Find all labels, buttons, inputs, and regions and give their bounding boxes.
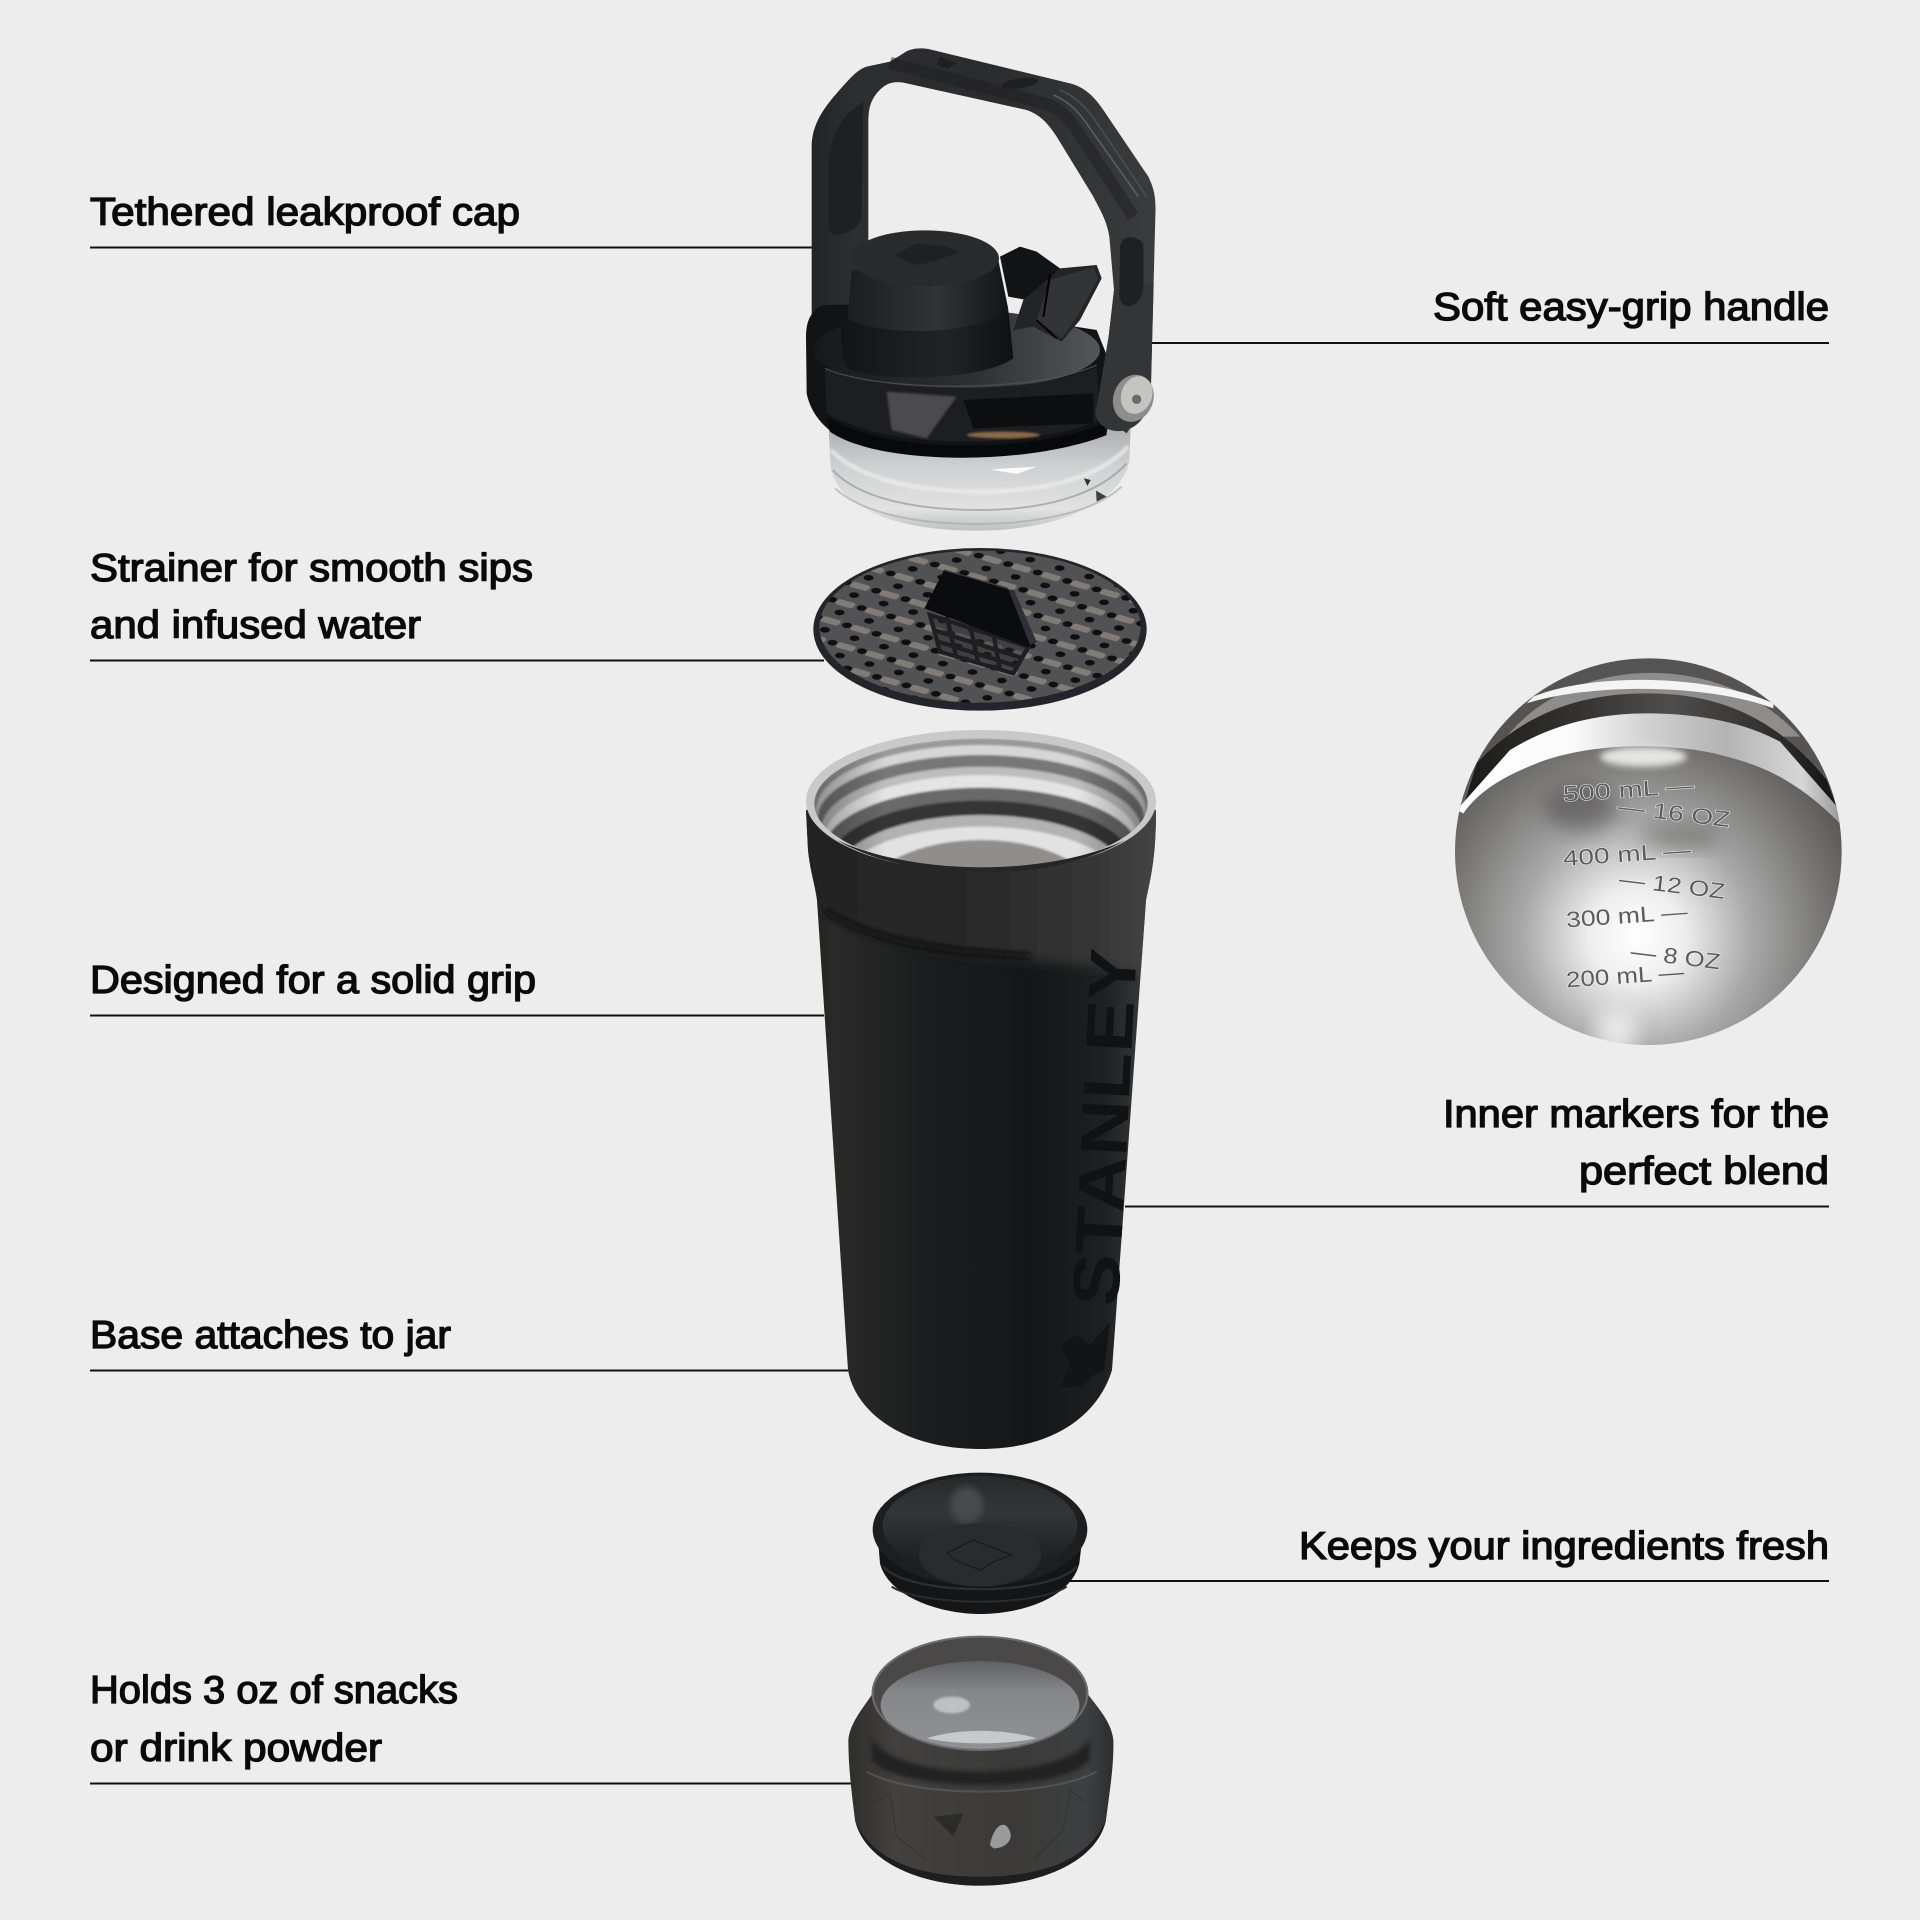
strainer rim (813, 548, 1147, 711)
label: Soft easy-grip handle: Soft easy-grip handle (1433, 286, 1829, 329)
label: Designed for a solid grip: Designed for a solid grip (90, 959, 536, 1002)
embossed scale: 300 mL: 300 mL — (1565, 899, 1688, 932)
brand mascot (1060, 1322, 1110, 1387)
label: Holds 3 oz of snacks or drink powder (90, 1669, 852, 1784)
tumbler shoulder (806, 810, 1156, 974)
embossed scale: 16 OZ: — 16 OZ (1616, 793, 1732, 832)
brand text: STANLEY (1058, 946, 1151, 1308)
tumbler body (806, 810, 1156, 1449)
top thread bands (1457, 673, 1840, 823)
product: base lid and snack jar (848, 1473, 1113, 1886)
dark collar (806, 303, 1117, 458)
label: Tethered leakproof cap: Tethered leakproof cap (90, 191, 520, 234)
threaded lid (873, 1473, 1087, 1614)
label: Strainer for smooth sips and infused water: and infused water (90, 604, 421, 647)
label: Keeps your ingredients fresh: Keeps your ingredients fresh (1299, 1525, 1829, 1568)
handle (812, 48, 1156, 433)
embossed scale: 500 mL: 500 mL — (1562, 773, 1695, 807)
label: Inner markers for the perfect blend: perfect blend (1579, 1150, 1829, 1193)
tumbler interior (806, 730, 1156, 872)
hinge latch (1000, 247, 1102, 342)
clear threaded base (828, 423, 1131, 531)
steel circle (1455, 658, 1842, 1045)
embossed scale: 200 mL: 200 mL — (1565, 959, 1685, 992)
strainer lattice (930, 615, 1028, 673)
snack jar (848, 1636, 1113, 1886)
strainer tab (924, 570, 1037, 647)
embossed scale: 8 OZ: — 8 OZ (1629, 938, 1722, 974)
tumbler front lip (837, 840, 1125, 873)
label: Holds 3 oz of snacks or drink powder: or drink powder (90, 1727, 382, 1770)
embossed scale: 12 OZ: — 12 OZ (1618, 866, 1727, 904)
label: Holds 3 oz of snacks or drink powder: Holds 3 oz of snacks (90, 1669, 458, 1712)
label: Base attaches to jar: Base attaches to jar (90, 1314, 451, 1357)
spout top cap (841, 230, 1013, 377)
label: Inner markers for the perfect blend: Inner markers for the (1443, 1093, 1829, 1136)
magnified inner markers (1455, 658, 1842, 1053)
pivot screw (1106, 369, 1160, 428)
product: cap with handle (806, 48, 1160, 531)
grip crease (826, 912, 1030, 956)
product: strainer disc (813, 548, 1147, 711)
product: tumbler (790, 800, 1170, 1449)
embossed scale: 400 mL: 400 mL — (1562, 837, 1692, 871)
label: Strainer for smooth sips and infused water: Strainer for smooth sips (90, 547, 533, 590)
label: Inner markers for the perfect blend (1125, 1093, 1829, 1206)
handle right arm front (1095, 237, 1154, 431)
label: Strainer for smooth sips and infused water (90, 547, 824, 660)
strainer mesh (819, 551, 1141, 703)
